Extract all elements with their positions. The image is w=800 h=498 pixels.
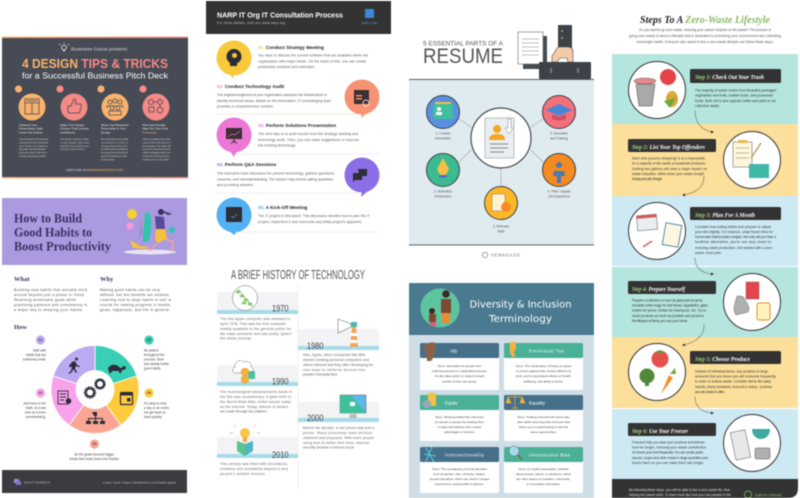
card: unconscious bias: are often based on mistaken, inaccurate, — [516, 477, 571, 481]
icons in donut — [58, 358, 132, 424]
2000: using tech to better their lives, internet — [303, 441, 369, 445]
step 4: reuse products as much as possible and preserve — [632, 314, 704, 318]
tip 4: customers. Every process — [142, 154, 170, 158]
why — [100, 276, 171, 312]
card: emotional tax: to protect against bias, feeling different at — [516, 369, 571, 373]
tip 2: The person needs to relate — [60, 137, 90, 141]
header: NARP IT ORG — [361, 22, 378, 25]
node 1 contact — [426, 96, 460, 140]
card: equity: advantages or barriers. — [444, 430, 475, 434]
tip 3: to build loyal and audience — [101, 147, 128, 151]
step 5: Instead of individual items, buy produce in large — [695, 370, 768, 374]
2000: phone. Many previously used devices — [303, 431, 372, 435]
donut chart — [51, 346, 139, 434]
step 05: Be patient — [144, 348, 158, 352]
what: What — [14, 276, 30, 283]
footer: By following these steps, you will be able to live a zero waste life, thus — [629, 488, 730, 492]
step 3 — [628, 202, 781, 260]
tip 2: and then they build in your — [60, 144, 89, 148]
step 01 text: organization with major banks. On the basis of this, one can create — [258, 60, 366, 64]
step 4: the lifespan of items you use your home. — [632, 319, 688, 323]
tip 3: to those rules. — [101, 157, 115, 161]
card: emotional tax: Emotional Tax — [529, 348, 565, 354]
step 04: a day or an event, — [144, 406, 170, 410]
tip 4: needs to be on the table. — [142, 157, 170, 161]
step 1: vegetables and fruits, bubble foods, and processed — [695, 94, 773, 98]
tip 4: map so the main points of — [142, 140, 171, 144]
tip 1: energy, accessing a whole — [19, 154, 46, 158]
panel: history of technology — [217, 267, 379, 490]
step 6: freeze them so you can make them last longer. — [632, 461, 704, 465]
logo: VENNGAGE — [491, 252, 520, 258]
node 3 skills: 3. Relevant — [493, 224, 509, 228]
step 1: Step 1: Check Out Your Trash — [695, 75, 765, 81]
bubble 2 — [344, 80, 380, 118]
card: unconscious bias: Noun: An implicit association, whether — [518, 467, 569, 471]
step 05 — [144, 335, 169, 370]
card: ally: underrepresented or marginalized groups. — [432, 369, 488, 373]
card: equity — [420, 393, 499, 441]
node 1 contact: 1. Contact — [436, 132, 450, 136]
icon: document — [58, 391, 68, 404]
tip 3: Design — [101, 130, 111, 134]
tip 1: Use the data for the success — [19, 137, 49, 141]
step 2: Getting two gallons will have a major impact on — [632, 167, 707, 171]
1980: others followed and they often developing for — [303, 363, 374, 367]
step 01: 01 — [39, 338, 42, 342]
step 6: food for longer, reducing your waste contribution. — [632, 446, 707, 450]
tip 4 — [139, 85, 171, 161]
1990 — [217, 361, 298, 414]
step 5 — [628, 344, 781, 400]
subtitle: for a Successful Business Pitch Deck — [22, 72, 169, 80]
node 4 experience: 4. Paid / Unpaid — [548, 190, 571, 194]
1970: the mass consumer and was pretty "green" — [220, 332, 293, 336]
step 05: 05 — [147, 338, 151, 342]
step 05: process. Slow — [144, 358, 165, 362]
2000: obtained new purposes. With more people — [303, 436, 374, 440]
step 2: Step 2: List Your Top Offenders — [632, 145, 706, 151]
step 5: Step 5: Choose Produce — [695, 357, 750, 363]
step 05 text — [258, 205, 370, 224]
step 4: Prepare a collection or such as glass jars for jams, — [632, 298, 703, 302]
footer bar — [2, 470, 187, 493]
step 02 text: identify technical issues. Based on this information, IT consulting/ng team — [217, 99, 331, 103]
what — [14, 276, 87, 312]
step 2 — [628, 132, 780, 188]
card: ally: Ally — [450, 348, 458, 354]
step 6: sauces, soups and other meals in large quantities and — [632, 456, 708, 460]
panel: diversity terminology — [409, 283, 594, 498]
footer: helping the planet earth. To learn more tips how you can partake in the — [629, 493, 731, 497]
what: practicing patience and consistency is — [14, 303, 87, 307]
background panel — [409, 79, 594, 245]
1980: 1980 — [307, 341, 324, 351]
step 04 text: The executive team discusses the present technology, gathers questions, — [217, 172, 335, 176]
1990: are made through the platform. — [220, 410, 268, 414]
why: Learning how to keep habits in tact is — [100, 298, 171, 302]
step 02 text — [217, 84, 331, 108]
card: intersectionality: experiences, opportunities & barriers. — [435, 482, 485, 486]
card: emotional tax: Noun: The combination of being on guard — [516, 364, 571, 368]
bubble 4 — [344, 158, 380, 197]
how heading: How — [14, 324, 27, 331]
step 3: waste meal plan. — [695, 251, 722, 255]
what: around beyond just a phase or trend. — [14, 293, 85, 297]
node 2 motivation: 2. Motivation — [434, 190, 452, 194]
step 3: your diet slightly. For instance, swap frozen fries for — [695, 230, 774, 234]
node 3 skills — [484, 186, 518, 234]
bubble 1 — [216, 40, 252, 78]
step 01: Start with — [33, 348, 46, 352]
step 02 — [23, 388, 47, 419]
presenter line: Business Gurus present: — [71, 46, 128, 52]
step 05: good habits. — [144, 366, 161, 370]
step 03: As the goals become bigger, — [74, 452, 115, 456]
card: ally: outside of their own group. — [442, 380, 477, 384]
card: intersectionality — [420, 447, 499, 493]
step 6: So freeze your food frequently. You can create pasta — [632, 450, 703, 454]
step 01 text: preliminary solutions and estimates. — [258, 65, 315, 69]
card: equality: same opportunities. — [530, 430, 557, 434]
1980 — [298, 319, 379, 376]
intro: Do you want to go zero-waste, reducing your carbon footprint on the planet? The process of — [639, 28, 771, 32]
why: Why — [100, 276, 114, 283]
step 1: foods. Both old to and capsule coffee and adds to our — [695, 99, 777, 103]
1980: started creating personal computers and — [303, 358, 369, 362]
node 2 motivation: Introduction — [435, 194, 452, 198]
title: 4 DESIGN TIPS & TRICKS — [22, 57, 168, 71]
tip 4: Give your audience the clear — [142, 137, 171, 141]
1990: the World Wide Web, better known today — [220, 400, 291, 404]
bubble 5 — [216, 198, 252, 235]
tip 3: Personality In Your — [101, 127, 126, 131]
header: NARP IT Org IT Consultation Process — [217, 10, 343, 20]
step 2: to keep your pile of bags! — [632, 177, 662, 181]
1970: The first Apple computer was released in — [220, 317, 290, 321]
step 1: The majority of waste comes from Beautiful-packaged — [695, 88, 776, 92]
panel: good habits — [2, 198, 187, 493]
step 4 — [628, 274, 780, 330]
step 02: sure at a never — [25, 410, 47, 414]
1980: new ways to immerse devices into — [303, 368, 365, 372]
node 5 education: and Training — [550, 136, 568, 140]
tip 1: Level And Culture — [19, 130, 43, 134]
runner illustration — [124, 209, 176, 254]
2010 — [217, 425, 298, 476]
step 4: bottles for juices, bottles for shampoos, etc. Try to — [632, 308, 706, 312]
tip 1: Presentation Sale — [19, 127, 43, 131]
tip 4: ensure it was planned and — [142, 147, 171, 151]
step 3: healthier alternative, you're one step closer to — [695, 240, 771, 244]
center document — [471, 108, 531, 168]
step 05 text: The IT project is discussed. This discussion decides how to plan the IT — [258, 214, 370, 218]
2010: creations and revelations beyond a very — [220, 467, 288, 471]
2000: security became a serious issue. — [303, 446, 355, 450]
node 5 education — [542, 96, 576, 140]
step 02: Add more to the — [23, 402, 46, 406]
card: intersectionality: Noun: The overlapping of social identities — [432, 467, 487, 471]
step 02 text: The engineer/engineers of your organization assesses the infrastructure to — [217, 93, 327, 97]
2000 — [298, 395, 379, 450]
2010: This century was filled with innovations, — [220, 462, 288, 466]
tip 1: Observe Your — [19, 123, 37, 127]
2010: 2010 — [272, 450, 288, 460]
step 03 text: technology audit. Then, you can make suggestions to improve — [258, 138, 359, 142]
icon: gears — [85, 379, 105, 398]
step 01 text: 01. Conduct Strategy Meeting — [258, 45, 324, 50]
card: emotional tax: wellbeing, and ability to thrive. — [523, 380, 564, 384]
step 4: reusable cotton bags for loaf bread, vegetables, glass — [632, 304, 708, 308]
1970: 1970 — [272, 304, 288, 314]
step 4: Step 4: Prepare Yourself — [632, 287, 686, 293]
title: How to Build — [14, 212, 82, 226]
step 02: habit, at a rate — [26, 406, 46, 410]
why: crucial for making progress in health, — [100, 303, 171, 307]
step 02: overwhelming. — [25, 415, 46, 419]
tip 1: commitment of the presented — [19, 140, 48, 144]
card: equality: often while assuming that everyone also — [517, 420, 571, 424]
step 04: track quickly. — [144, 415, 162, 419]
header: For more details, visit our www.narp.org. — [217, 21, 286, 25]
heading: 5 ESSENTIAL PARTS OF A — [423, 40, 504, 48]
step 6: Freezers help you save your produce and leftover — [632, 440, 706, 444]
card: equality: Noun: Treating everyone the same way, — [517, 415, 570, 419]
step 05: throughout the — [144, 353, 165, 357]
card: ally: Noun: advocates for people from — [438, 364, 482, 368]
tip 3 — [97, 85, 129, 161]
2000: Before the decade, a cell phone was just a — [303, 426, 374, 430]
card: intersectionality: Intersectionality — [445, 452, 485, 458]
intro — [629, 28, 781, 44]
step 05 text: project, implement it and overcome any initial project's apparent. — [258, 220, 362, 224]
card: emotional tax — [504, 342, 583, 390]
icon: hierarchy — [86, 412, 105, 424]
icon: bulb — [59, 42, 69, 51]
step 04: but get back on — [144, 410, 166, 414]
tip 1: good sale. You must share the — [19, 147, 46, 151]
step 03: break them back down into chunks. — [70, 457, 120, 461]
step 5: carrots, cherry tomatoes, broccoli or celery - produce — [695, 385, 772, 389]
step 6: Step 6: Use Your Freezer — [632, 429, 689, 435]
2000: 2000 — [307, 413, 324, 423]
step 04 text: and providing answers. — [217, 183, 254, 187]
bands — [612, 54, 798, 479]
card: equality: starts out on equal footing or with the — [519, 425, 568, 429]
1990: as the internet. Today, billions of dollars — [220, 405, 288, 409]
tip 4: the company. This clarity will — [142, 144, 171, 148]
step 1 — [628, 62, 781, 118]
tip 4: Plan and Visually — [142, 123, 166, 127]
card: equity: Noun: Working toward fair outcomes — [435, 415, 484, 419]
card: unconscious bias: about people, places, or situations, which — [516, 472, 571, 476]
header: Diversity & Inclusion — [470, 300, 572, 310]
1980: Man, Apple, other companies like IBM — [303, 353, 365, 357]
icon: turtle — [108, 365, 126, 373]
1990: The technological advancements made in — [220, 390, 292, 394]
header — [409, 283, 594, 335]
card: equity: in ways that address their unique — [438, 425, 482, 429]
footer — [612, 479, 798, 498]
step 04 text — [217, 162, 335, 187]
tip 2 — [56, 85, 90, 151]
card: intersectionality: sexual orientation, which can result in unique — [430, 477, 490, 481]
step 05: and steady builds — [144, 362, 169, 366]
step 02 text: provides a comprehensive solution. — [217, 104, 274, 108]
footer bar: SHATTERBOX — [24, 480, 50, 484]
step 02 text: 02. Conduct Technology Audit — [217, 84, 285, 89]
1970: the whole concept. — [220, 336, 252, 340]
tip 3: for programs and business — [101, 151, 129, 155]
1970 — [217, 286, 298, 340]
why: difficult, but the benefits are endless. — [100, 293, 170, 297]
node 1 contact: Information — [435, 136, 451, 140]
tip 2: Choices That Convey — [60, 127, 89, 131]
step 02: 02 — [39, 391, 42, 395]
tip 3: Be expressive and solidly — [101, 137, 129, 141]
1980: people's everyday lives. — [303, 372, 338, 376]
footer link: Learn more at www.BusinessGurus.com — [66, 168, 123, 172]
tip 4: Map Out Your Core — [142, 127, 169, 131]
card: ally: An ally takes action to support people — [435, 374, 485, 378]
intro: going zero-waste is about a lifestyle that is dedicated to prioritizing your environment and cultivating — [629, 34, 781, 38]
title: Boost Productivity — [14, 240, 112, 254]
tip 4: Processes — [142, 130, 157, 134]
card: equity: Equity — [445, 400, 458, 406]
step 3: reducing waste production. Get started with a zero- — [695, 246, 773, 250]
intro: meaningful habits. Everyone who wants to live a zero-waste lifestyle can follow these steps: — [636, 40, 774, 44]
card: unconscious bias: Unconscious Bias — [529, 452, 571, 458]
2010: people's wildest dreams. — [220, 472, 266, 476]
tip 3: strong brand voice and — [101, 144, 128, 148]
step 04 text: concerns, and misunderstanding. The session may involve asking questions — [217, 178, 333, 182]
step 3: Step 3: Plan For A Month — [695, 213, 756, 219]
tip 1 — [15, 85, 49, 158]
illustration: hand with briefcase — [518, 25, 591, 79]
node 5 education: 5. Education — [550, 132, 568, 136]
title: A BRIEF HISTORY OF TECHNOLOGY — [231, 267, 365, 282]
icon: calendar — [120, 392, 132, 404]
step 3: homemade baked potato wedges. Not only will you have a — [695, 235, 776, 239]
why: goals, happiness, and life in general. — [100, 308, 170, 312]
tip 3: growth because you stick — [101, 154, 128, 158]
step 04 text: 04. Perform Q&A Sessions — [217, 162, 277, 167]
node 4 experience: Job Experience — [548, 194, 570, 198]
step 04: 04 — [147, 391, 151, 395]
card: ally — [420, 342, 499, 390]
step 2: Start with grocery shopping! It is a impossible — [632, 156, 705, 160]
header: Terminology — [488, 314, 552, 325]
step 5: amounts that you know you will consume frequently — [695, 374, 776, 378]
tip 2: to your decision they used — [60, 140, 90, 144]
step 6 — [628, 414, 780, 472]
what: Building new habits that actually stick — [14, 288, 87, 292]
title: Good Habits to — [14, 226, 92, 240]
step 2: waste reduction. While down your waste bought — [632, 172, 704, 176]
bubble 3 — [216, 118, 252, 157]
why: Making good habits can be very — [100, 288, 160, 292]
step 04 — [144, 388, 170, 419]
tip 2: Make Your Design — [60, 123, 85, 127]
panel: IT consultation process — [206, 1, 391, 235]
card: equality: Equality — [529, 400, 546, 406]
node 2 motivation — [426, 154, 460, 198]
step 1: collective waste. — [695, 104, 720, 108]
what: Reaching achievable goals while — [14, 298, 76, 302]
footer: EARTH FRIEND — [755, 494, 783, 498]
node 3 skills: Skills — [497, 230, 505, 234]
1990: the 90s was revolutionary. It gave birth to — [220, 395, 291, 399]
tip 2: Confidence — [60, 130, 76, 134]
card: unconscious bias: or incomplete information. — [526, 482, 561, 486]
step 01 text: You have to discuss the current software that are available within the — [258, 54, 368, 58]
title — [14, 212, 112, 254]
step 03 text: 03. Perform Solutions Presentation — [258, 123, 336, 128]
footer bar: Learn more: https://shatterbox.com/habit-guide — [103, 480, 176, 484]
panel: design tips — [2, 36, 188, 178]
card: equity: for people or groups by treating them — [435, 420, 485, 424]
step 03 — [70, 439, 120, 461]
step 01 text — [258, 45, 368, 69]
icon: runner — [68, 358, 80, 374]
tip 3: committed to reflect a — [101, 140, 128, 144]
step 03 text — [258, 123, 359, 148]
what: a major key to keeping your habits. — [14, 308, 83, 312]
step 03 text: the existing technology. — [258, 144, 296, 148]
step 5: you can snack on often. — [695, 390, 725, 394]
step 01 — [23, 335, 46, 362]
header — [206, 1, 391, 34]
1990: 1990 — [272, 376, 288, 386]
step 03 text: The next step is to audit results from the strategy meeting and — [258, 132, 358, 136]
tip 4: well as well aligned with your — [142, 151, 171, 155]
tip 1: your Tenets, you shall be a — [19, 144, 48, 148]
dotted arrows — [682, 111, 714, 414]
card: unconscious bias — [504, 446, 583, 493]
card: equality — [504, 394, 583, 441]
panel: resume — [409, 25, 594, 258]
heading: RESUME — [423, 45, 503, 68]
tip 3: Show Your Business' — [101, 123, 129, 127]
step 03: 03 — [93, 442, 96, 446]
panel: zero-waste lifestyle — [612, 14, 798, 498]
card: intersectionality: such as gender, race, ethnicity, religion, — [433, 472, 486, 476]
step 3: Consider how eating habits and prepare to adjust — [695, 225, 771, 229]
step 01: extremely small. — [23, 358, 46, 362]
node 4 experience — [542, 154, 576, 198]
title: Steps To A Zero-Waste Lifestyle — [640, 14, 770, 26]
card: emotional tax: work, and its associated effects on health, — [516, 374, 571, 378]
1970: readily available to the general public for — [220, 327, 292, 331]
1970: April 1976. This was the first computer — [220, 322, 287, 326]
step 2: for a majority of the waste a household produces. — [632, 162, 706, 166]
step 5: in order to reduce waste. Consider items like baby — [695, 380, 771, 384]
tip 1: products which will sell in — [19, 151, 48, 155]
step 05 text: 05. A Kick-Off Meeting — [258, 205, 308, 210]
step 04: It's okay to miss — [144, 402, 167, 406]
step 01: habits that are — [26, 353, 46, 357]
tip 2: business and service. — [60, 147, 85, 151]
